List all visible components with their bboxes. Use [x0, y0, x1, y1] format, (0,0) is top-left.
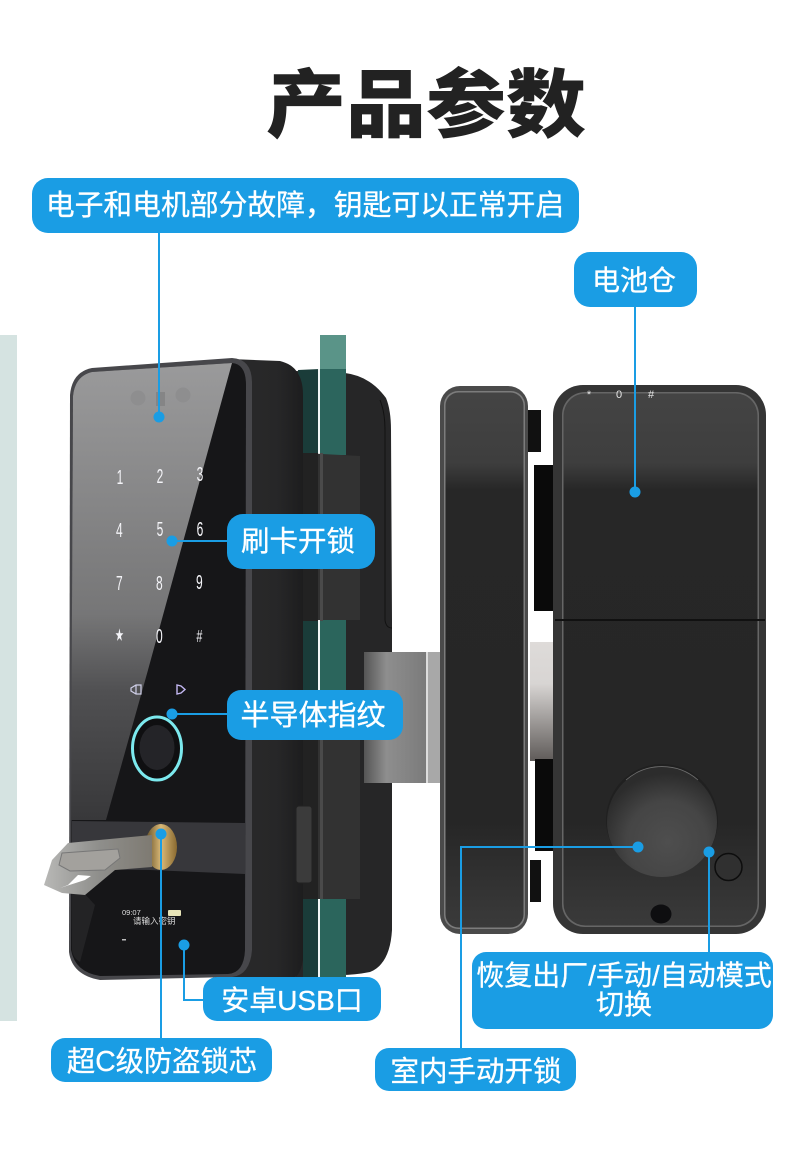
keypad reflection: *: [587, 389, 592, 401]
keypad reflection: #: [648, 389, 655, 401]
right lock: back view: [440, 385, 766, 934]
callout: fingerprint: [227, 690, 403, 740]
connector lines: [159, 233, 709, 1050]
display: 请输入密钥: [133, 916, 176, 926]
keypad numbers: 2: [157, 466, 163, 488]
keypad reflection: [587, 389, 655, 401]
callout: card unlock: [227, 514, 375, 569]
callout: USB port: 安卓USB口: [221, 985, 363, 1016]
callout: fingerprint: 半导体指纹: [240, 699, 386, 732]
left lock: front view: [44, 335, 441, 985]
keypad reflection: 0: [616, 389, 622, 401]
panel glare: [71, 363, 232, 820]
callout: battery compartment: [574, 252, 697, 307]
keypad numbers: 7: [116, 573, 123, 595]
callout: battery compartment: 电池仓: [592, 265, 676, 296]
callout: indoor manual unlock: 室内手动开锁: [390, 1056, 562, 1088]
display: 09:07: [122, 908, 141, 917]
lock and bell icons: [131, 685, 141, 694]
latch blocks: [528, 410, 541, 452]
lower clamp: [303, 700, 360, 899]
front panel frame: [69, 358, 252, 980]
keypad numbers: [115, 464, 203, 648]
keypad numbers: 8: [156, 573, 163, 595]
callout: key backup: 电子和电机部分故障，钥匙可以正常开启: [46, 190, 564, 222]
keypad numbers: 6: [197, 519, 203, 541]
callout: indoor manual unlock: [375, 1048, 576, 1091]
background band: [0, 335, 17, 1021]
side switch: [296, 806, 312, 883]
narrow plate: [440, 386, 528, 934]
key bar: [72, 821, 245, 874]
back body: [296, 371, 392, 978]
key: [44, 835, 152, 895]
callout: factory reset and mode switch: 恢复出厂/手动/自动模式: [476, 960, 772, 991]
display: [122, 908, 181, 940]
knob: [606, 764, 718, 877]
connector dots: [154, 412, 714, 950]
callout: USB port: [203, 977, 381, 1021]
callout: factory reset and mode switch: 切换: [596, 989, 652, 1020]
keypad numbers: 9: [196, 572, 203, 594]
keypad numbers: #: [196, 627, 203, 647]
keypad numbers: 0: [156, 626, 163, 648]
glass panel: [320, 335, 346, 380]
upper clamp: [303, 453, 360, 620]
camera lenses: [130, 390, 146, 406]
keypad numbers: ★: [115, 628, 124, 644]
wide plate: [553, 385, 766, 934]
callout: lock core: 超C级防盗锁芯: [67, 1045, 257, 1077]
lock body side: [215, 359, 303, 985]
title: 产品参数: [266, 65, 586, 147]
fingerprint sensor: [132, 717, 182, 780]
keypad numbers: 5: [157, 519, 163, 541]
lock cylinder: [145, 824, 177, 870]
callout: card unlock: 刷卡开锁: [241, 526, 355, 558]
key hole: [650, 904, 672, 924]
keypad numbers: 1: [117, 467, 123, 489]
keypad numbers: 3: [197, 464, 203, 486]
callout: key backup: [32, 178, 579, 233]
bolt: [364, 652, 428, 783]
callout: lock core: [51, 1038, 272, 1082]
keypad numbers: 4: [116, 520, 123, 542]
front panel glass: [71, 363, 246, 976]
reset button: [715, 854, 742, 880]
callout: factory reset and mode switch: [472, 952, 773, 1029]
